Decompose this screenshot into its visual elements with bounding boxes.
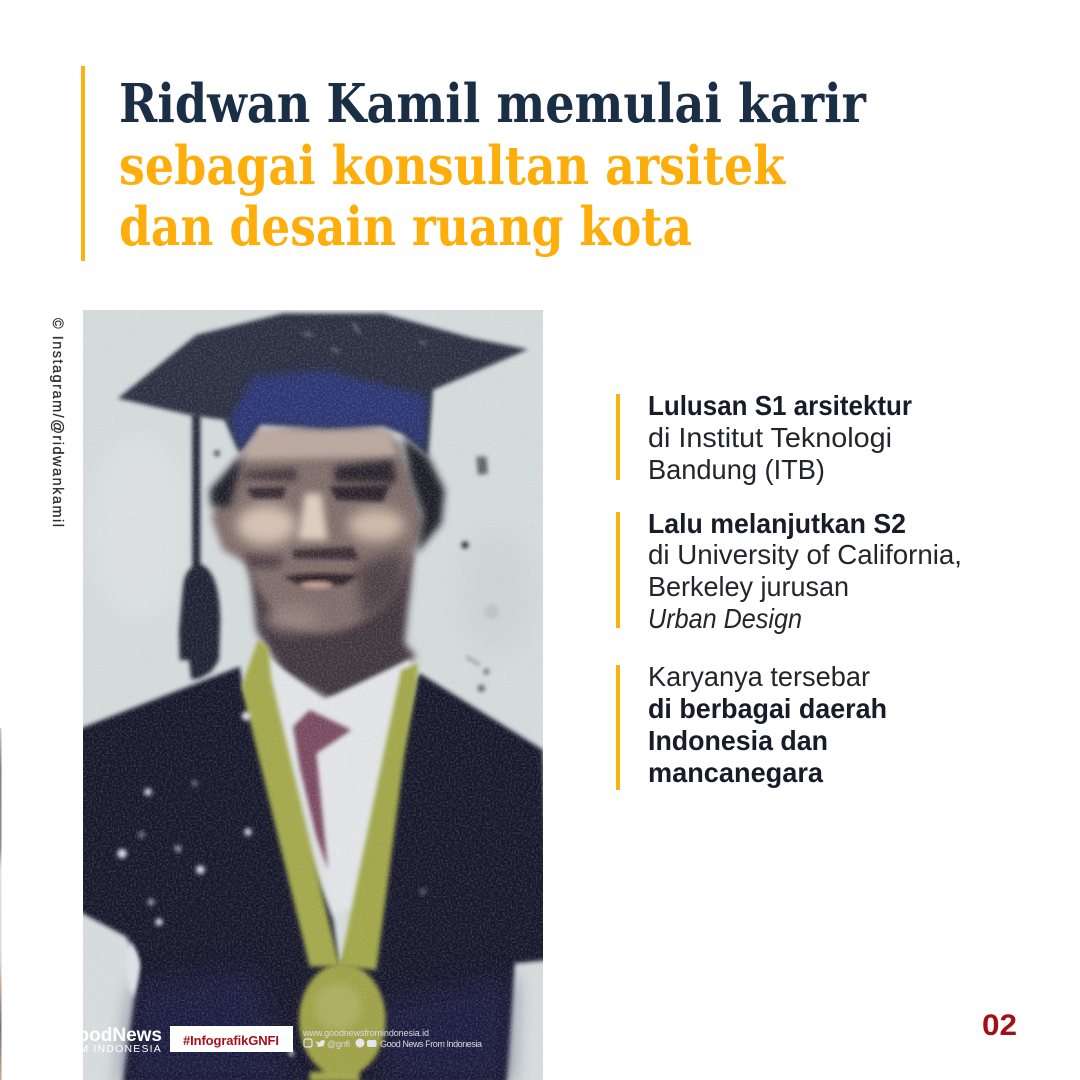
- title: Ridwan Kamil memulai karir: [119, 73, 867, 135]
- footer: logo: FROM INDONESIA: [54, 1043, 162, 1055]
- footer: website and social: @gnfi: [327, 1039, 350, 1049]
- tie: [293, 710, 351, 870]
- title: [119, 73, 867, 258]
- arm highlight: [126, 942, 139, 997]
- medal: [299, 963, 386, 1080]
- point 2: [616, 508, 962, 634]
- point 2: Lalu melanjutkan S2: [648, 508, 906, 539]
- point 2: Urban Design: [648, 603, 802, 634]
- neck and face: [211, 426, 425, 703]
- point 3: Karyanya tersebar: [648, 661, 870, 692]
- point 1: di Institut Teknologi: [648, 422, 892, 453]
- point 3: Indonesia dan: [648, 725, 828, 756]
- title: dan desain ruang kota: [119, 196, 692, 258]
- jacket: [76, 667, 550, 1080]
- point 1: [616, 390, 912, 485]
- footer: website and social: www.goodnewsfromindonesia.id: [302, 1028, 429, 1038]
- footer: website and social: Good News From Indonesia: [380, 1039, 482, 1049]
- icon: youtube: [367, 1040, 376, 1047]
- tassel: [179, 413, 220, 679]
- title: sebagai konsultan arsitek: [119, 135, 786, 197]
- hair: [210, 437, 445, 553]
- point 3: [616, 661, 887, 790]
- point 2: Berkeley jurusan: [648, 571, 849, 602]
- footer: hashtag label: [170, 1026, 293, 1052]
- point 3: mancanegara: [648, 757, 823, 788]
- point 2: di University of California,: [648, 539, 962, 570]
- icon: facebook: [356, 1038, 364, 1048]
- photo: graduate portrait: [76, 310, 550, 1080]
- footer: hashtag label: #InfografikGNFI: [183, 1033, 279, 1048]
- title accent bar: [81, 66, 85, 261]
- point 1: Bandung (ITB): [648, 454, 825, 485]
- medal ribbon: [241, 640, 418, 970]
- mortarboard cap: [118, 313, 528, 457]
- footer: logo: [83, 1027, 162, 1052]
- drawn portrait shapes: [76, 310, 550, 1080]
- footer: logo: GoodNews: [63, 1025, 162, 1046]
- jacket specks: [117, 711, 426, 1056]
- icon: instagram: [304, 1039, 312, 1047]
- page number: 02: [982, 1009, 1017, 1042]
- shirt: [266, 657, 416, 913]
- footer: website and social: [302, 1028, 482, 1049]
- point 3: di berbagai daerah: [648, 693, 887, 724]
- point 1: Lulusan S1 arsitektur: [648, 390, 912, 421]
- photo credit: © Instagram/@ridwankamil: [49, 318, 65, 527]
- photo grain: [83, 310, 543, 1080]
- icon: twitter: [315, 1040, 325, 1047]
